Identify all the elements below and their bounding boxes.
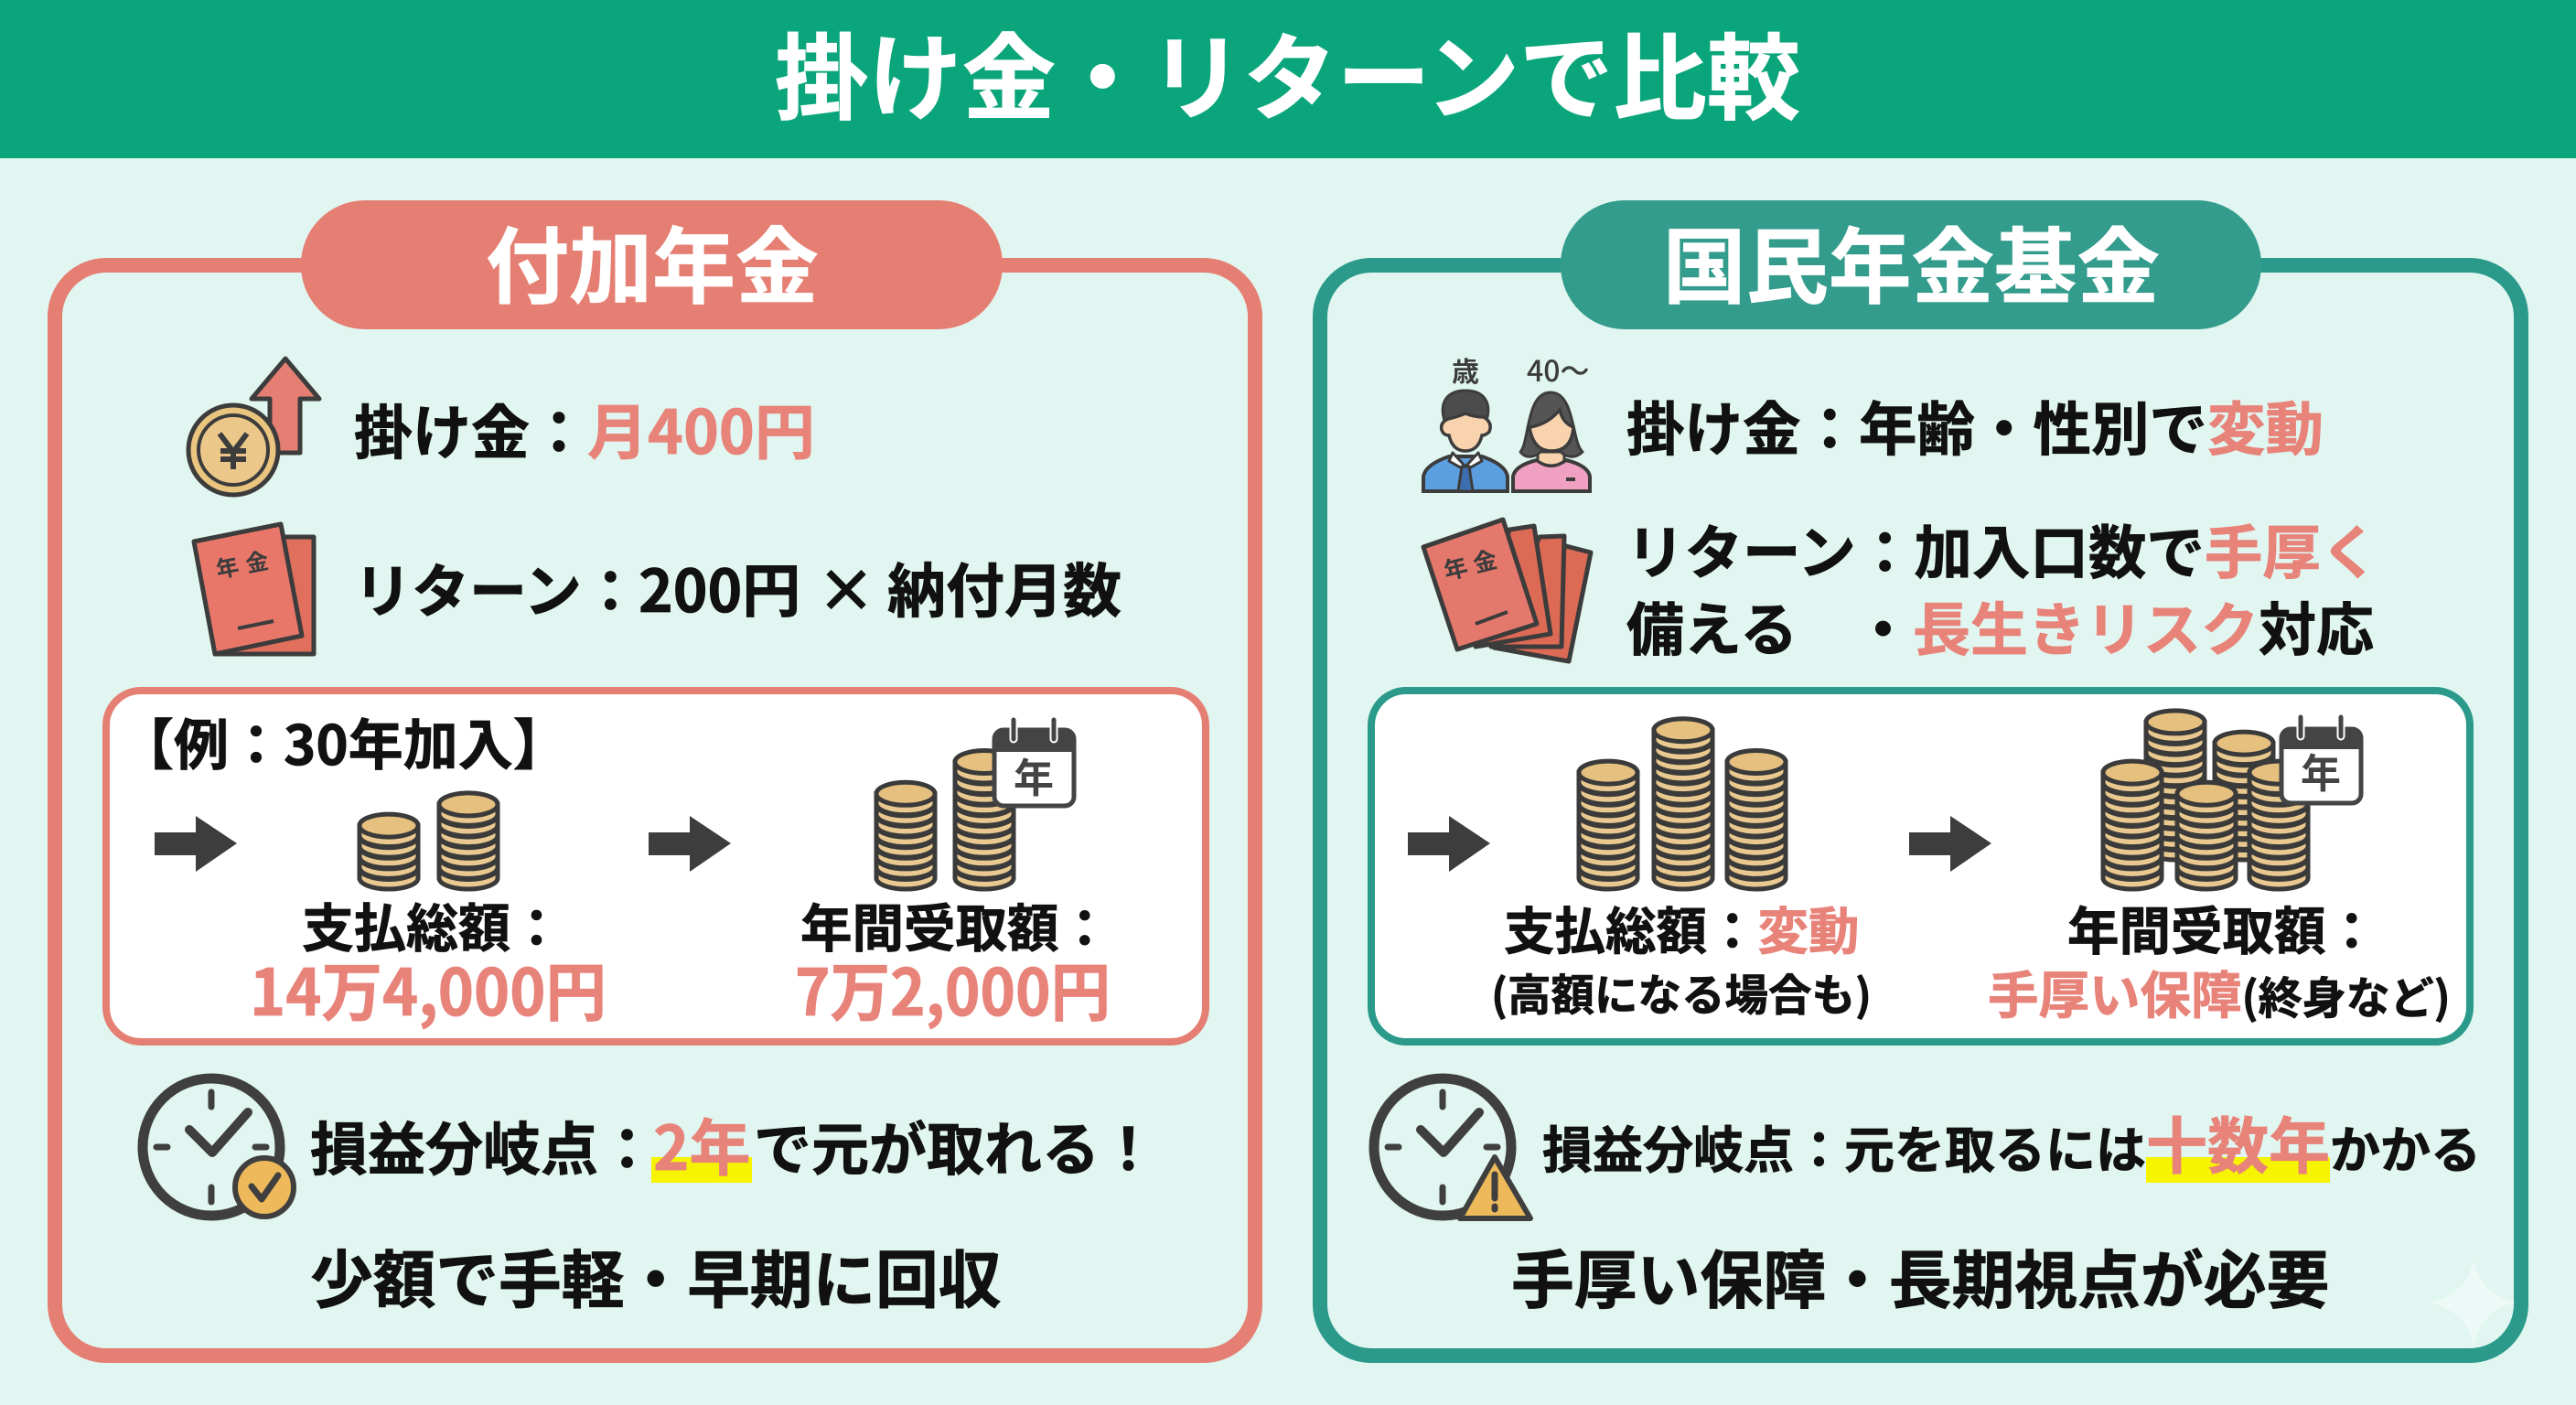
highlight marker [2146, 1157, 2330, 1183]
break-even text: 2年 [653, 1099, 751, 1188]
icon: clock with check badge [143, 1078, 294, 1217]
value: annual received: 7万2,000円 [795, 942, 1111, 1035]
note: total paid: (高額になる場合も) [1491, 960, 1872, 1024]
coin stacks with calendar: received: 年 [1014, 745, 1054, 804]
label: total paid: 支払総額： [302, 887, 563, 962]
summary: 少額で手軽・早期に回収 [310, 1229, 1002, 1321]
value: total paid: 14万4,000円 [250, 942, 606, 1035]
example box [106, 691, 1206, 1042]
icon: clock with warning triangle [1374, 1078, 1530, 1218]
row: リターン: リターン： [354, 546, 639, 629]
coin stacks with calendar: received [2103, 711, 2361, 889]
row: リターン: × [817, 545, 875, 629]
break-even text: 十数年 [2146, 1098, 2330, 1186]
row: 備える: 長生きリスク [1913, 585, 2259, 668]
panel frame [1320, 265, 2521, 1356]
arrow [1408, 816, 1490, 872]
row: 備える: ・ [1854, 585, 1912, 668]
icon: man and woman with age labels: 40〜 [1527, 349, 1589, 391]
panel heading pill [301, 200, 1003, 329]
label: total paid: 支払総額：変動 [1504, 891, 1860, 964]
arrow [1909, 816, 1991, 872]
label: annual received: 年間受取額： [800, 887, 1111, 962]
arrow [155, 816, 237, 872]
value: annual received: 手厚い保障(終身など) [1988, 955, 2451, 1028]
row: 掛け金: 掛け金： [354, 387, 588, 471]
coin stacks with calendar: received [876, 720, 1074, 889]
panel heading pill [1561, 200, 2261, 329]
row: 備える: 対応 [2259, 585, 2374, 668]
icon: fanned pension books: 年金 [1440, 540, 1507, 587]
panel frame [55, 265, 1255, 1356]
icon: yen coin with up arrow [188, 359, 319, 495]
title banner: 掛け金・リターンで比較 [775, 4, 1800, 139]
label: annual received: 年間受取額： [2067, 890, 2377, 965]
coin stacks with calendar: received: 年 [2301, 741, 2341, 799]
row: 備える: 備える [1626, 585, 1798, 668]
break-even text: 損益分岐点：元を取るには [1542, 1110, 2146, 1183]
coin stacks: paid [1579, 719, 1786, 889]
highlight marker [651, 1157, 752, 1183]
icon: man and woman with age labels [1423, 349, 1590, 491]
arrow [649, 816, 731, 872]
row: リターン: 200円 [639, 545, 800, 629]
coin stacks: paid [360, 793, 498, 889]
panel: 付加年金 [55, 200, 1255, 1356]
decorative sparkle [2430, 1260, 2516, 1346]
panel heading pill: 国民年金基金 [1663, 201, 2160, 321]
row: 掛け金: 掛け金：年齢・性別で変動 [1626, 383, 2324, 467]
icon: pension book: 年金 [213, 542, 278, 585]
break-even text: で元が取れる！ [754, 1104, 1157, 1187]
icon: man and woman with age labels: 歳 [1452, 349, 1479, 390]
summary: 手厚い保障・長期視点が必要 [1511, 1229, 2329, 1321]
title banner [0, 0, 2576, 158]
break-even text: かかる [2330, 1110, 2481, 1183]
break-even text: 損益分岐点： [310, 1104, 656, 1187]
row: 掛け金: 月400円 [587, 384, 815, 472]
example box [1371, 691, 2470, 1042]
panel heading pill: 付加年金 [486, 200, 819, 321]
row: リターン: 納付月数 [887, 545, 1122, 629]
example heading: 【例：30年加入】 [119, 702, 568, 781]
row: リターン: リターン：加入口数で手厚く [1626, 507, 2378, 591]
panel: 国民年金基金 [1320, 200, 2521, 1356]
icon: fanned pension books [1423, 520, 1591, 661]
icon: pension book [194, 524, 314, 654]
